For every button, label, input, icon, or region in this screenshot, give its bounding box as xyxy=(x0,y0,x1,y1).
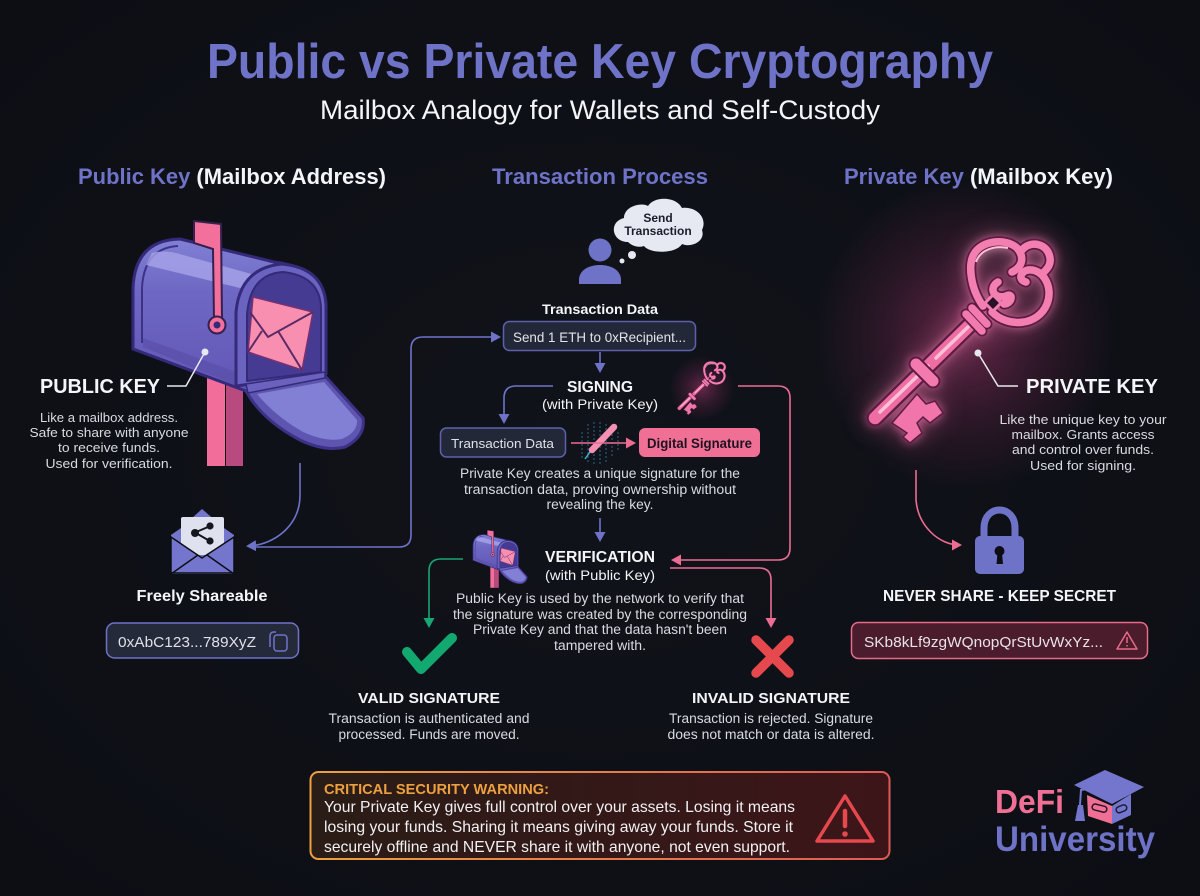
verification heading xyxy=(545,549,655,583)
logo: DeFi University: University xyxy=(995,820,1155,859)
private key description: and control over funds. xyxy=(1012,442,1154,457)
transaction data box xyxy=(504,322,696,350)
verification heading: VERIFICATION xyxy=(545,549,655,566)
icon: check mark xyxy=(407,638,452,669)
callout: critical security warning: securely offline and NEVER share it with anyone, not even support. xyxy=(324,839,790,856)
verification description: tampered with. xyxy=(554,638,646,653)
connector: public key to transaction data xyxy=(250,337,499,547)
arrow: mailbox to shareable envelope xyxy=(248,463,300,546)
icon: user xyxy=(579,238,621,284)
arrow: private key to verification xyxy=(673,386,790,560)
icon: small key xyxy=(670,356,734,420)
arrow: verification to invalid xyxy=(670,568,771,626)
label: transaction data: Transaction Data xyxy=(542,301,658,317)
private key description: Used for signing. xyxy=(1030,458,1136,473)
public key description xyxy=(30,410,188,471)
private key description: mailbox. Grants access xyxy=(1012,427,1155,442)
panel: private key xyxy=(815,164,1167,658)
private key box xyxy=(852,622,1148,658)
arrow: signing to verification xyxy=(599,518,601,540)
verification description: Public Key is used by the network to verify that xyxy=(456,591,744,606)
label: public key: PUBLIC KEY xyxy=(40,376,161,398)
verification heading: (with Public Key) xyxy=(545,567,655,583)
icon: cross mark xyxy=(756,640,789,673)
callout: critical security warning: Your Private Key gives full control over your assets. Losing it means xyxy=(324,799,795,816)
signing input box: Transaction Data xyxy=(451,436,555,451)
callout leader xyxy=(974,350,1018,386)
arrow: verification to valid xyxy=(429,559,463,626)
icon: graduation cap xyxy=(1074,770,1144,824)
callout leader xyxy=(167,348,208,386)
icon: small mailbox xyxy=(473,530,527,588)
icon: mailbox xyxy=(133,221,363,466)
signing description: revealing the key. xyxy=(546,497,654,512)
signing heading: (with Private Key) xyxy=(542,396,658,412)
heading: private key: Private Key (Mailbox Key) xyxy=(844,164,1113,189)
thought bubble xyxy=(614,199,704,264)
verification description: Private Key and that the data hasn't been xyxy=(473,622,727,637)
signing description: Private Key creates a unique signature for the xyxy=(460,466,740,481)
arrow: signing to data xyxy=(504,386,553,422)
public key description: Like a mailbox address. xyxy=(40,410,178,425)
logo: DeFi University xyxy=(995,770,1155,859)
panel: public key xyxy=(30,164,386,658)
invalid signature text: INVALID SIGNATURE xyxy=(692,690,850,707)
private key description xyxy=(1000,412,1167,473)
invalid signature text: does not match or data is altered. xyxy=(668,727,874,742)
private key description: Like the unique key to your xyxy=(1000,412,1167,427)
icon: signing pen xyxy=(582,422,618,466)
icon: warning triangle xyxy=(817,796,873,841)
title: Public vs Private Key Cryptography xyxy=(207,35,993,89)
heading: transaction process: Transaction Process xyxy=(492,164,708,189)
digital signature box: Digital Signature xyxy=(647,436,752,451)
transaction data box: Send 1 ETH to 0xRecipient... xyxy=(513,329,686,345)
icon: glowing key xyxy=(875,242,1050,443)
arrow: pen to signature xyxy=(571,442,634,444)
callout: critical security warning: CRITICAL SECURITY WARNING: xyxy=(324,781,549,798)
valid signature text: processed. Funds are moved. xyxy=(338,727,520,742)
signing description xyxy=(460,466,740,512)
verification description: the signature was created by the corresponding xyxy=(453,607,747,622)
valid signature text: VALID SIGNATURE xyxy=(358,690,500,707)
icon: padlock xyxy=(975,510,1024,574)
arrow: data to signing xyxy=(599,352,601,371)
icon: open envelope with share symbol xyxy=(171,509,234,574)
thought bubble: Transaction xyxy=(624,224,692,238)
verification description xyxy=(453,591,747,653)
label: freely shareable: Freely Shareable xyxy=(136,588,268,605)
arrow: key to lock xyxy=(916,470,960,545)
public key description: to receive funds. xyxy=(58,440,160,455)
callout: critical security warning: losing your funds. Sharing it means giving away your funds. Store it xyxy=(324,819,794,836)
private key box: SKb8kLf9zgWQnopQrStUvWxYz... xyxy=(864,634,1103,651)
panel: transaction process xyxy=(250,164,874,742)
signing heading xyxy=(542,379,658,412)
digital signature box xyxy=(639,428,760,457)
label: never share: NEVER SHARE - KEEP SECRET xyxy=(883,588,1116,605)
address box: 0xAbC123...789XyZ xyxy=(118,634,256,651)
logo: DeFi University: DeFi xyxy=(995,783,1064,820)
subtitle: Mailbox Analogy for Wallets and Self-Custody xyxy=(320,95,881,125)
label: private key: PRIVATE KEY xyxy=(1026,376,1159,398)
valid signature text: Transaction is authenticated and xyxy=(328,711,530,726)
invalid signature text: Transaction is rejected. Signature xyxy=(669,711,873,726)
valid signature text xyxy=(328,690,530,742)
signing description: transaction data, proving ownership without xyxy=(464,482,736,497)
signing heading: SIGNING xyxy=(567,379,633,396)
signing input box xyxy=(440,428,566,457)
key glow xyxy=(815,180,1115,490)
public key description: Safe to share with anyone xyxy=(30,425,188,440)
public key description: Used for verification. xyxy=(46,456,172,471)
address box xyxy=(106,623,298,658)
invalid signature text xyxy=(668,690,874,742)
thought bubble: Send xyxy=(643,211,673,225)
callout: critical security warning xyxy=(310,772,890,859)
heading: public key: Public Key (Mailbox Address) xyxy=(78,164,386,189)
